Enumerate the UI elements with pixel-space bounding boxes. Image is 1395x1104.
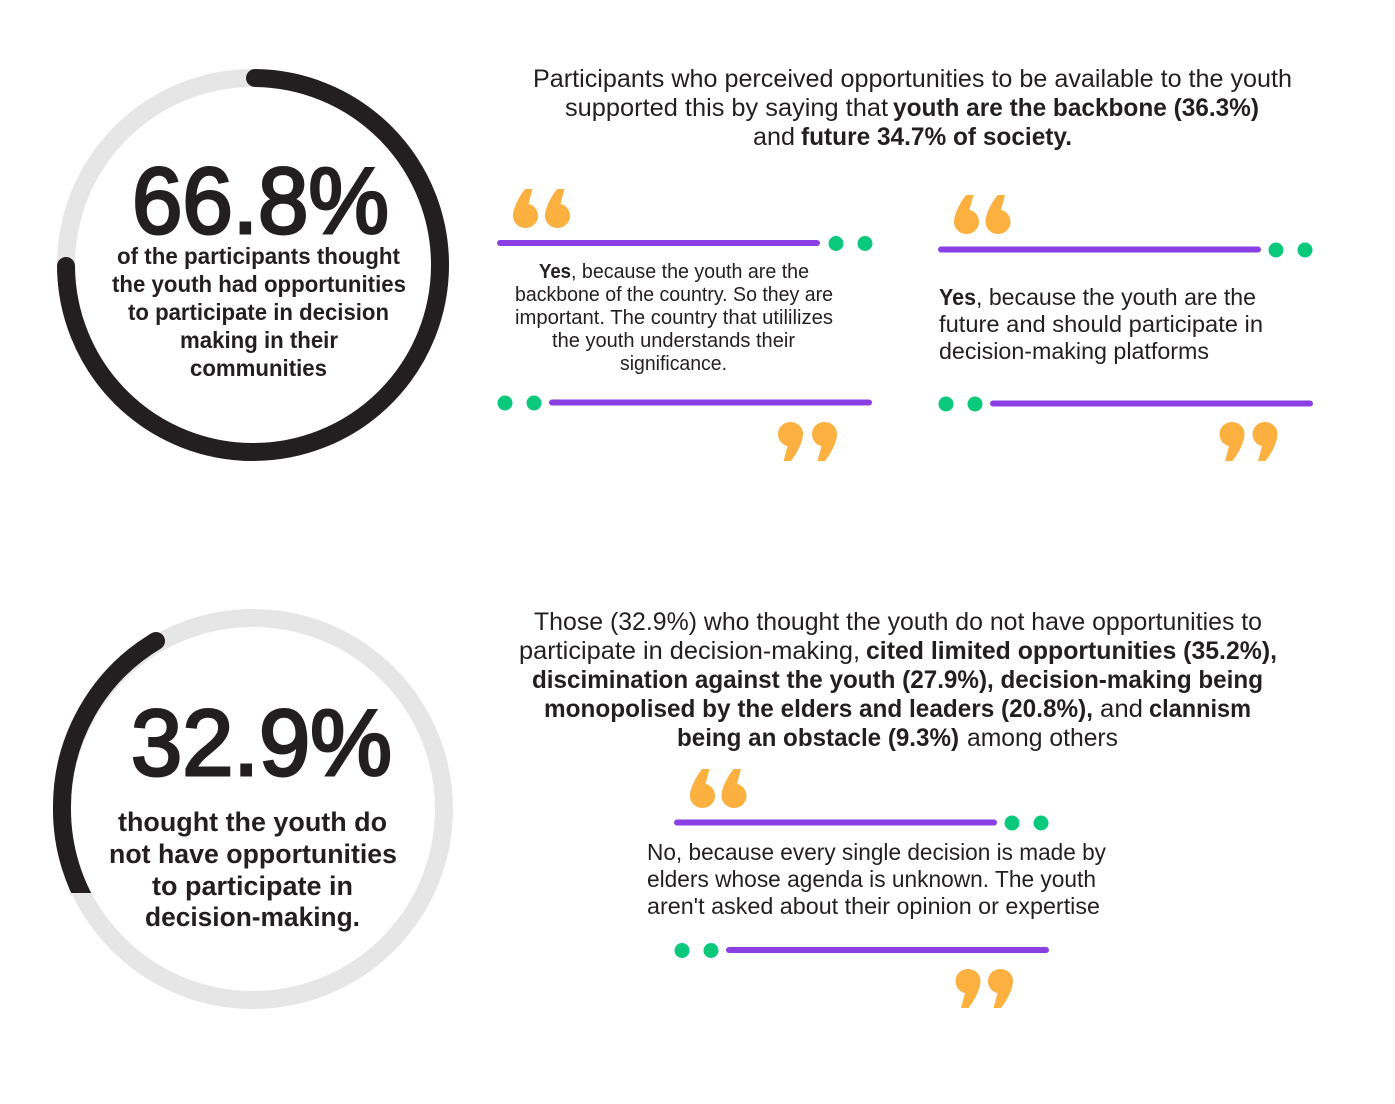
quote text: decision-making platforms	[939, 338, 1209, 364]
panel: quote future	[938, 195, 1313, 461]
icon: closing quote	[778, 422, 837, 461]
bottom rule with dots	[498, 396, 872, 410]
heading: perceived opportunities: future 34.7% of society.	[801, 123, 1072, 151]
icon: closing quote	[1220, 422, 1278, 461]
stat description	[109, 807, 397, 932]
stat description: making in their	[180, 327, 338, 353]
icon: opening quote	[690, 769, 746, 808]
top rule with dots	[674, 816, 1048, 830]
heading: perceived opportunities: supported this by saying that	[565, 94, 888, 122]
panel: quote backbone	[497, 189, 872, 461]
panel: quote elders	[647, 769, 1106, 1008]
heading: perceived opportunities: Participants who perceived opportunities to be available to the youth	[533, 65, 1292, 93]
heading: reasons for no opportunities: participate in decision-making,	[519, 637, 860, 665]
quote text: , because the youth are the	[571, 261, 809, 283]
heading: perceived opportunities: and	[753, 123, 795, 151]
heading: reasons for no opportunities: Those (32.9%) who thought the youth do not have opportunities to	[534, 608, 1262, 636]
icon: closing quote	[956, 969, 1013, 1008]
quote text	[647, 839, 1106, 919]
quote text: backbone of the country. So they are	[515, 284, 833, 306]
heading: reasons for no opportunities: clannism	[1149, 695, 1251, 723]
stat description: decision-making.	[145, 902, 360, 932]
big number: 32.9%: 32.9%	[131, 690, 392, 795]
top rule with dots	[497, 236, 872, 251]
stat description: thought the youth do	[118, 807, 387, 837]
heading: reasons for no opportunities: cited limited opportunities (35.2%),	[866, 637, 1277, 665]
quote text: No, because every single decision is made by	[647, 839, 1106, 865]
quote text	[939, 284, 1263, 364]
bottom rule with dots	[674, 943, 1049, 958]
quote text: future and should participate in	[939, 311, 1263, 337]
stat description: not have opportunities	[109, 839, 397, 869]
heading: reasons for no opportunities: and	[1100, 695, 1143, 723]
heading: reasons for no opportunities: monopolised by the elders and leaders (20.8%),	[544, 695, 1093, 723]
heading: reasons for no opportunities: being an obstacle (9.3%)	[677, 724, 959, 752]
heading: perceived opportunities: youth are the backbone (36.3%)	[893, 94, 1259, 122]
quote text	[515, 261, 833, 375]
quote text: important. The country that utililizes	[515, 307, 833, 329]
stat description: communities	[190, 355, 327, 381]
quote text: significance.	[620, 353, 727, 375]
donut chart: 66.8%	[66, 78, 440, 452]
quote text: Yes	[539, 261, 571, 283]
quote text: , because the youth are the	[976, 284, 1256, 310]
donut chart: 32.9%	[62, 618, 444, 1000]
big number: 66.8%: 66.8%	[132, 148, 389, 253]
panel: 66.8% donut stat	[66, 78, 440, 452]
stat description: the youth had opportunities	[112, 271, 406, 297]
stat description: of the participants thought	[117, 243, 400, 269]
panel: 32.9% donut stat	[62, 618, 444, 1000]
quote text: aren't asked about their opinion or expertise	[647, 893, 1100, 919]
icon: opening quote	[513, 189, 570, 228]
icon: opening quote	[954, 195, 1010, 234]
quote text: elders whose agenda is unknown. The youth	[647, 866, 1096, 892]
heading: reasons for no opportunities	[519, 608, 1277, 752]
heading: perceived opportunities	[533, 65, 1292, 151]
heading: reasons for no opportunities: discimination against the youth (27.9%), decision-making being	[532, 666, 1263, 694]
stat description: to participate in	[152, 871, 353, 901]
stat description	[112, 243, 406, 381]
quote text: the youth understands their	[552, 330, 795, 352]
heading: reasons for no opportunities: among others	[967, 724, 1118, 752]
stat description: to participate in decision	[128, 299, 389, 325]
top rule with dots	[938, 242, 1312, 258]
bottom rule with dots	[938, 396, 1313, 412]
quote text: Yes	[939, 284, 976, 310]
